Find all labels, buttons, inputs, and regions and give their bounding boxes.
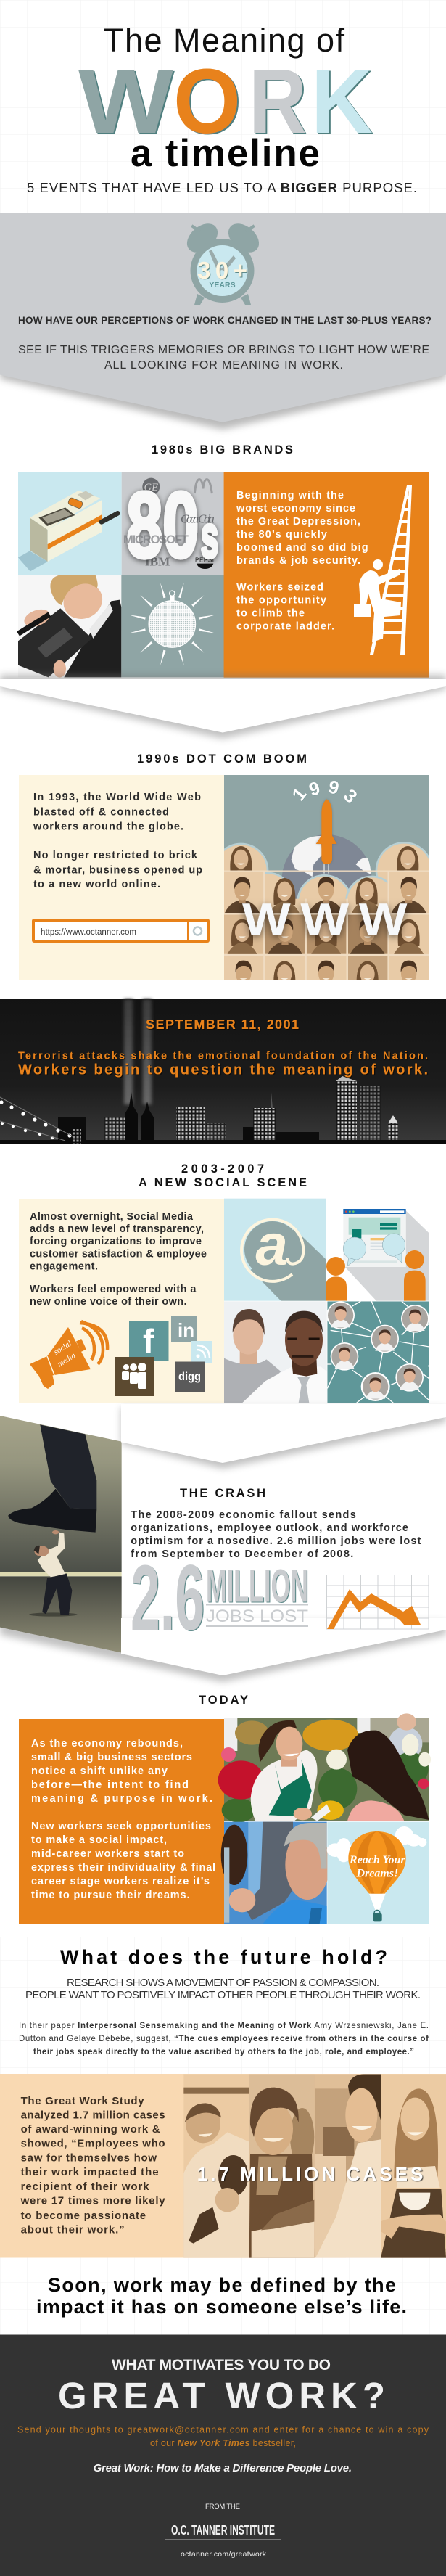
quotation paragraph: Dutton and Gelaye Debebe, suggest, “The cues employees receive from others in the course of (19, 2035, 429, 2043)
icon: disco ball (121, 575, 224, 677)
1980s text: corporate ladder. (236, 621, 334, 633)
network of people (326, 1301, 429, 1403)
icon: facebook (129, 1321, 168, 1361)
panel: great work study (0, 2074, 446, 2258)
title word WORK: R (249, 50, 307, 152)
brand logos: GE (144, 482, 158, 493)
big 80s numerals: 80 (126, 474, 199, 577)
1990s text: No longer restricted to brick (33, 850, 198, 861)
1980s text: to climb the (236, 608, 305, 620)
icon: rss (191, 1341, 212, 1363)
icon: alarm clock 30+ years (181, 218, 265, 305)
photo: florist with customer (218, 1713, 431, 1822)
book title: Great Work: How to Make a Difference People Love. (94, 2462, 352, 2474)
closing statement: Soon, work may be defined by the (48, 2274, 396, 2296)
crash text (131, 1509, 421, 1560)
panel: September 11 2001 (0, 999, 446, 1144)
photo: woman smiling back (315, 2074, 381, 2258)
footer invitation: of our New York Times bestseller, (150, 2438, 296, 2448)
September 11 heading: SEPTEMBER 11, 2001 (146, 1017, 299, 1032)
1980s image grid (18, 472, 224, 678)
intro text (18, 344, 429, 372)
page background grid: future section (0, 1937, 446, 2074)
1990s text (33, 792, 202, 890)
statistic 2.6 million jobs lost: MILLION (206, 1560, 308, 1612)
closing statement (36, 2274, 407, 2318)
panel: 1980s (18, 472, 429, 678)
1980s text: the Great Depression, (236, 516, 360, 528)
today text: career stage workers realize it’s (31, 1876, 210, 1887)
icon: hot air balloon: Dreams! (355, 1867, 398, 1879)
research statement (25, 1977, 421, 2001)
photo: senior businessman (221, 1822, 330, 1924)
icon: hot air balloon (327, 1822, 429, 1924)
1990s text: & mortar, business opened up (33, 865, 202, 877)
url bar (32, 919, 210, 943)
year 1993: 1 (289, 784, 310, 805)
today text: to make a social impact, (31, 1834, 167, 1846)
footer question: WHAT MOTIVATES YOU TO DO (112, 2357, 331, 2374)
brand logos: PEPSI (195, 557, 214, 564)
great work text: analyzed 1.7 million cases (21, 2109, 165, 2122)
1980s text: the opportunity (236, 595, 326, 607)
great work text: showed, “Employees who (21, 2138, 165, 2149)
social text: new online voice of their own. (30, 1296, 187, 1308)
photo: giant shoe crushing worker (0, 1416, 122, 1653)
crash heading: THE CRASH (180, 1487, 265, 1500)
social text: forcing organizations to improve (30, 1236, 202, 1247)
panel: 1980s orange text (224, 472, 429, 678)
icon: megaphone: media (56, 1351, 78, 1369)
panel: 2003-2007 (19, 1199, 429, 1403)
great work text: were 17 times more likely (20, 2194, 165, 2207)
1980s text: Beginning with the (236, 490, 344, 501)
panel: the crash (131, 1487, 429, 1650)
quotation paragraph: their jobs speak directly to the value ascribed by others to the job, role, and employee.” (33, 2048, 414, 2056)
today text: small & big business sectors (31, 1752, 192, 1763)
from the: FROM THE (205, 2503, 240, 2511)
closing statement: impact it has on someone else’s life. (36, 2296, 407, 2318)
brand wordmarks over numerals: MICROSOFT (123, 533, 189, 546)
icon: megaphone (30, 1321, 107, 1389)
great work text: saw for themselves how (21, 2152, 157, 2164)
social text: customer satisfaction & employee (30, 1248, 207, 1260)
1980s text: the 80’s quickly (236, 529, 327, 541)
heading: today: TODAY (199, 1694, 248, 1707)
social text: engagement. (30, 1261, 98, 1273)
statistic 2.6 million jobs lost: JOBS LOST (206, 1607, 308, 1626)
heading: 2003-2007 (139, 1162, 307, 1189)
quotation paragraph (19, 2022, 429, 2056)
page background grid: closing statement (0, 2257, 446, 2335)
heading: 1990s: 1990s DOT COM BOOM (137, 752, 307, 766)
1.7 million cases: 1.7 MILLION CASES (197, 2163, 423, 2185)
research statement: RESEARCH SHOWS A MOVEMENT OF PASSION & COMPASSION. (67, 1977, 379, 1989)
subtitle: 5 EVENTS THAT HAVE LED US TO A BIGGER PURPOSE. (27, 180, 417, 195)
photo strip: four workers (183, 2074, 446, 2258)
title word WORK: K (311, 50, 373, 152)
great work text: The Great Work Study (21, 2095, 144, 2107)
arrow: chevron above crash (121, 1404, 446, 1463)
panel: today (19, 1713, 431, 1924)
icon: alarm clock 30+ years: 30+ (197, 257, 247, 284)
url bar: https://www.octanner.com (41, 928, 136, 937)
heading: 2003-2007: A NEW SOCIAL SCENE (139, 1176, 307, 1189)
icon: globe (282, 834, 372, 924)
icon: digg: digg (178, 1371, 201, 1383)
today text: notice a shift unlike any (31, 1765, 168, 1777)
panel: footer call to action (0, 2335, 446, 2576)
year 1993: 3 (339, 785, 361, 808)
intro text: ALL LOOKING FOR MEANING IN WORK. (104, 359, 343, 372)
brand logos: IBM (145, 554, 170, 568)
footer invitation: Send your thoughts to greatwork@octanner.com and enter for a chance to win a copy (17, 2425, 429, 2435)
image: 80s brands (122, 472, 224, 577)
panel: 1990s (19, 775, 432, 996)
quotation paragraph: In their paper Interpersonal Sensemaking and the Meaning of Work Amy Wrzesniewski, Jane E. (19, 2022, 429, 2030)
research statement: PEOPLE WANT TO POSITIVELY IMPACT OTHER PEOPLE THROUGH THEIR WORK. (25, 1989, 421, 2001)
arrow: chevron below crash (121, 1618, 446, 1675)
today text: As the economy rebounds, (31, 1738, 183, 1750)
social text (30, 1211, 207, 1308)
social text: adds a new level of transparency, (30, 1223, 204, 1235)
great work text: about their work.” (21, 2223, 125, 2236)
1980s text: boomed and so did big (236, 542, 368, 554)
today text: express their individuality & final (31, 1862, 215, 1874)
footer big headline: GREAT WORK? (58, 2375, 385, 2416)
crash text: The 2008-2009 economic fallout sends (131, 1509, 356, 1521)
photo: two coworkers (224, 1301, 327, 1403)
icon: digg (175, 1361, 205, 1392)
great work text: of award-winning work & (21, 2123, 160, 2136)
footer url: octanner.com/greatwork (181, 2550, 267, 2559)
light beams (124, 999, 152, 1104)
footer invitation (17, 2425, 429, 2448)
1980s text: brands & job security. (236, 555, 360, 567)
1990s text: to a new world online. (33, 879, 160, 890)
year 1993 (289, 776, 361, 808)
big 80s numerals: s (201, 504, 218, 570)
icon: rocket (316, 799, 336, 874)
1990s text: In 1993, the World Wide Web (33, 792, 201, 803)
1980s text (236, 490, 368, 633)
heading: future: What does the future hold? (60, 1946, 387, 1968)
photo: man and woman (183, 2074, 249, 2258)
social image grid (224, 1199, 429, 1403)
intro text: SEE IF THIS TRIGGERS MEMORIES OR BRINGS TO LIGHT HOW WE’RE (18, 344, 429, 356)
chart: falling line (326, 1575, 429, 1629)
photo: woman with coffee cup (381, 2074, 446, 2258)
brand wordmarks over numerals: Coca-Cola (181, 512, 215, 526)
year 1993: 9 (307, 778, 323, 800)
today image grid (218, 1713, 431, 1924)
title word WORK (78, 50, 373, 152)
1990s text: blasted off & connected (33, 807, 169, 819)
1990s text: workers around the globe. (33, 821, 183, 833)
great work text: to become passionate (21, 2210, 146, 2222)
icon: website with people talking (326, 1199, 429, 1301)
arrow: white chevron 1 (0, 675, 446, 739)
photo: man with box (249, 2074, 315, 2258)
today text: mid-career workers start to (31, 1848, 184, 1860)
September 11 statement line 2: Workers begin to question the meaning of work. (18, 1062, 428, 1078)
heading: 2003-2007: 2003-2007 (181, 1162, 264, 1176)
image: brick phone (18, 472, 122, 575)
page background grid: header (0, 0, 446, 213)
title line one: The Meaning of (104, 22, 344, 59)
today text: time to pursue their dreams. (31, 1890, 190, 1901)
today text: before—the intent to find (31, 1779, 189, 1791)
great work text: recipient of their work (21, 2181, 149, 2193)
icon: hot air balloon: Reach Your (349, 1854, 405, 1866)
logo: O.C. Tanner Institute: O.C. TANNER INSTITUTE (171, 2523, 275, 2538)
social text: Workers feel empowered with a (30, 1284, 197, 1295)
social text: Almost overnight, Social Media (30, 1211, 194, 1223)
great work text (20, 2095, 165, 2236)
crash text: from September to December of 2008. (131, 1549, 353, 1560)
crash text: optimism for a nosedive. 2.6 million jobs were lost (131, 1535, 421, 1547)
title word WORK: O (173, 50, 241, 152)
bridge lights (0, 1100, 72, 1139)
1980s text: worst economy since (236, 503, 355, 514)
title word WORK: W (78, 50, 173, 152)
icon: alarm clock 30+ years: YEARS (209, 281, 236, 290)
brand logos (142, 478, 214, 569)
icon: megaphone: social (52, 1339, 73, 1357)
1980s text: Workers seized (236, 582, 323, 594)
intro question: HOW HAVE OUR PERCEPTIONS OF WORK CHANGED IN THE LAST 30-PLUS YEARS? (18, 315, 431, 326)
statistic 2.6 million jobs lost: 2.6 (131, 1546, 205, 1650)
year 1993: 9 (326, 776, 341, 799)
shadows of crash chevrons (0, 1408, 446, 1682)
icon: linkedin (171, 1316, 197, 1342)
title line three: a timeline (131, 132, 320, 175)
icon: at sign (224, 1199, 326, 1301)
photo grid of faces (224, 842, 429, 980)
image: www rocket and faces (224, 775, 429, 980)
photo: man with boombox (18, 575, 121, 678)
today text (31, 1738, 215, 1901)
panel: intro gray chevron (0, 213, 446, 430)
great work text: their work impacted the (21, 2166, 159, 2178)
title block (27, 22, 417, 195)
today text: meaning & purpose in work. (31, 1793, 212, 1805)
icon: man climbing ladder (354, 485, 412, 655)
icon: myspace (115, 1357, 154, 1396)
September 11 statement line 1: Terrorist attacks shake the emotional foundation of the Nation. (18, 1051, 428, 1062)
heading: 1980s: 1980s BIG BRANDS (152, 443, 293, 456)
icon: linkedin: in (178, 1319, 194, 1341)
icon: at sign: a (255, 1212, 288, 1276)
today text: New workers seek opportunities (31, 1821, 211, 1832)
brand wordmarks over numerals (123, 512, 215, 546)
crash text: organizations, employee outlook, and workforce (131, 1522, 408, 1534)
WWW letters: WWW (242, 895, 417, 945)
city skyline (0, 1076, 446, 1144)
icon: facebook: f (143, 1322, 154, 1360)
